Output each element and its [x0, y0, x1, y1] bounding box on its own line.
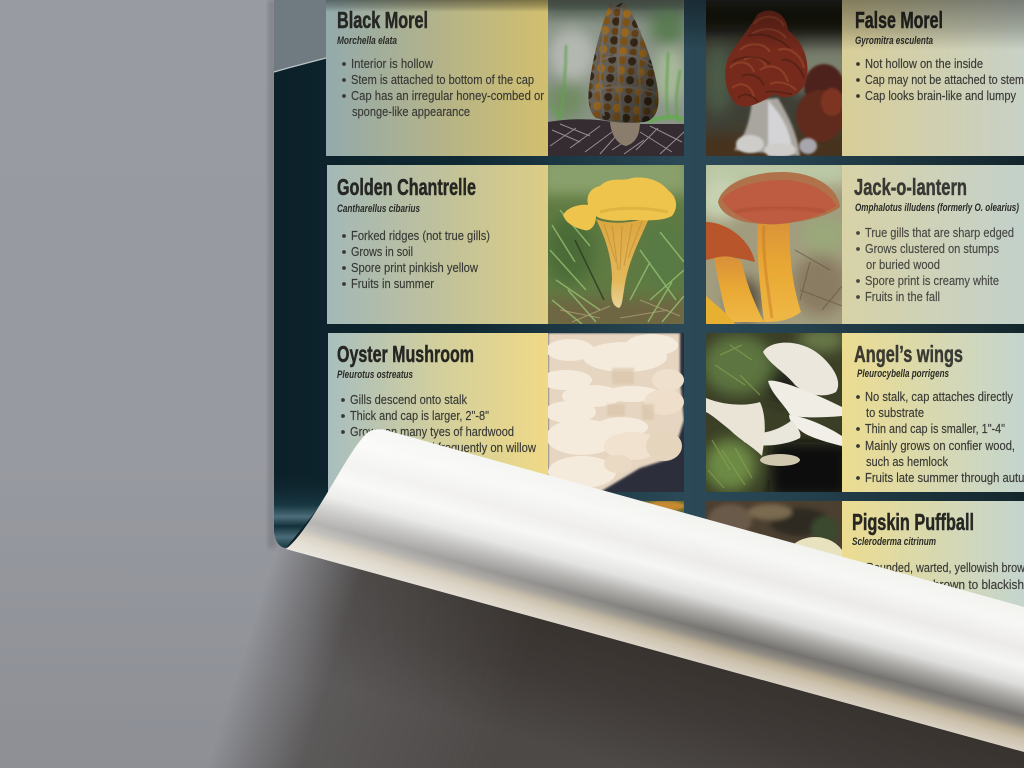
latin name: black morel: Morchella elata	[337, 35, 397, 47]
photo: pigskin puffball	[706, 501, 842, 556]
bullet list: golden chantrelle: Fruits in summer	[351, 276, 435, 291]
cap shapes	[763, 343, 838, 395]
heading: golden chantrelle: Golden Chantrelle	[337, 174, 476, 200]
bullet list: jack-o-lantern: or buried wood	[866, 257, 940, 272]
heading: black morel: Black Morel	[337, 7, 428, 33]
stem	[610, 120, 640, 146]
panel: jack-o-lantern	[842, 165, 1024, 324]
second cap	[796, 64, 844, 142]
funnel stem	[596, 216, 650, 308]
heading: pigskin puffball: Pigskin Puffball	[852, 509, 974, 535]
log	[548, 119, 684, 156]
poster sheet	[274, 0, 1024, 620]
bullet list: jack-o-lantern: Spore print is creamy white	[865, 273, 999, 288]
panel: pigskin puffball	[842, 501, 1024, 631]
bullet list: angel's wings: such as hemlock	[866, 454, 948, 469]
bullet list: black morel: sponge-like appearance	[352, 104, 470, 119]
bullet list: golden chantrelle	[342, 228, 490, 291]
bullet list: oyster mushroom: and frequently on willow	[416, 440, 537, 455]
panel: angel's wings	[842, 333, 1024, 492]
bullet list: pigskin puffball	[866, 560, 1024, 592]
rolled paper curl	[280, 420, 1024, 760]
panel: false morel	[842, 0, 1024, 156]
heading: angel's wings: Angel’s wings	[854, 341, 963, 367]
panel: golden chantrelle	[327, 165, 548, 324]
panel: oyster mushroom	[328, 333, 548, 492]
latin name: oyster mushroom: Pleurotus ostreatus	[337, 369, 413, 381]
photo: black morel	[540, 0, 690, 156]
puffball	[794, 537, 842, 556]
bullet list: jack-o-lantern: Fruits in the fall	[865, 289, 940, 304]
bullet list: oyster mushroom: Thick and cap is larger, 2"-8"	[350, 408, 489, 423]
torn paper corner	[274, 0, 326, 72]
latin name: angel's wings: Pleurocybella porrigens	[857, 368, 949, 380]
photo: jack-o-lantern	[706, 165, 842, 324]
photo: oyster mushroom	[540, 333, 684, 492]
bullet list: oyster mushroom: Gills descend onto stalk	[350, 392, 467, 407]
cap	[588, 2, 658, 123]
bullet list: false morel	[856, 56, 1024, 103]
bullet list: black morel: Cap has an irregular honey-combed or	[351, 88, 545, 103]
left small mushroom	[706, 222, 755, 262]
bullet list: golden chantrelle: Grows in soil	[351, 244, 413, 259]
photo: golden chantrelle	[548, 165, 684, 324]
poster shadow on wall	[268, 0, 276, 548]
bullet list: angel's wings	[856, 389, 1024, 485]
heading: jack-o-lantern: Jack-o-lantern	[854, 174, 967, 200]
bullet list: pigskin puffball: Interior is	[866, 577, 927, 592]
main cap	[718, 172, 840, 224]
stems	[734, 98, 800, 156]
bullet list: black morel: Interior is hollow	[351, 56, 434, 71]
latin name: pigskin puffball: Scleroderma citrinum	[852, 536, 936, 548]
bullet list: oyster mushroom: Grows on many tyes of hardwood	[350, 424, 514, 439]
bullet list: angel's wings: to substrate	[866, 405, 924, 420]
bullet list: golden chantrelle: Spore print pinkish yellow	[351, 260, 479, 275]
heading: false morel: False Morel	[855, 7, 943, 33]
top edge shadow	[326, 0, 1024, 50]
bullet list: oyster mushroom	[341, 392, 537, 455]
photo: fourth row left sliver	[642, 501, 684, 513]
curl cast shadow	[220, 548, 1024, 768]
main cap	[725, 11, 807, 106]
bullet list: black morel	[342, 56, 545, 119]
bullet list: black morel: Stem is attached to bottom of the cap	[351, 72, 534, 87]
bullet list: jack-o-lantern	[856, 225, 1014, 304]
bullet list: false morel: Not hollow on the inside	[865, 56, 983, 71]
photo: angel's wings	[706, 333, 842, 492]
latin name: golden chantrelle: Cantharellus cibarius	[337, 203, 420, 215]
latin name: false morel: Gyromitra esculenta	[855, 35, 933, 47]
bullet list: golden chantrelle: Forked ridges (not true gills)	[351, 228, 490, 243]
main stem	[757, 215, 801, 322]
bullet list: jack-o-lantern: Grows clustered on stumps	[865, 241, 999, 256]
cap	[563, 178, 676, 230]
panel: black morel	[326, 0, 548, 156]
glossy sheen at poster lower-left	[274, 470, 328, 548]
heading: oyster mushroom: Oyster Mushroom	[337, 341, 474, 367]
photo: false morel	[706, 0, 842, 156]
